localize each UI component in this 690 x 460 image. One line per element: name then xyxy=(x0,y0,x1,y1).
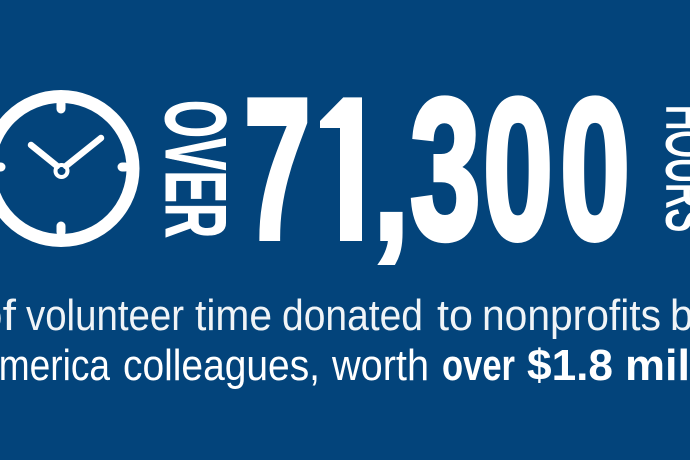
big number: 71,300: 7 xyxy=(244,57,311,280)
big number: 71,300: 0 xyxy=(483,59,553,281)
body text line 1: to xyxy=(437,291,473,340)
big number: 71,300: , xyxy=(374,98,408,271)
big number: 71,300: 3 xyxy=(410,58,481,281)
icon: clock xyxy=(0,96,133,240)
big number: 71,300: 1 xyxy=(313,57,384,281)
body text line 1 xyxy=(0,291,690,340)
big number: 71,300: 0 xyxy=(560,59,630,281)
body text line 2 xyxy=(0,341,690,390)
infographic canvas xyxy=(0,90,690,389)
emphasis: over $1.8 million: over xyxy=(442,341,515,390)
body text line 1: donated xyxy=(282,291,423,340)
emphasis: over $1.8 million: $1.8 xyxy=(527,341,613,390)
body text line 2: colleagues, xyxy=(123,341,320,390)
body text line 2: worth xyxy=(331,341,429,390)
body text line 1: time xyxy=(195,291,272,340)
emphasis: over $1.8 million xyxy=(442,341,690,390)
body text line 1: nonprofits xyxy=(482,291,661,340)
label: OVER: OVER xyxy=(147,100,243,238)
big number: 71,300 xyxy=(247,95,627,265)
body text line 1: volunteer xyxy=(26,291,184,340)
